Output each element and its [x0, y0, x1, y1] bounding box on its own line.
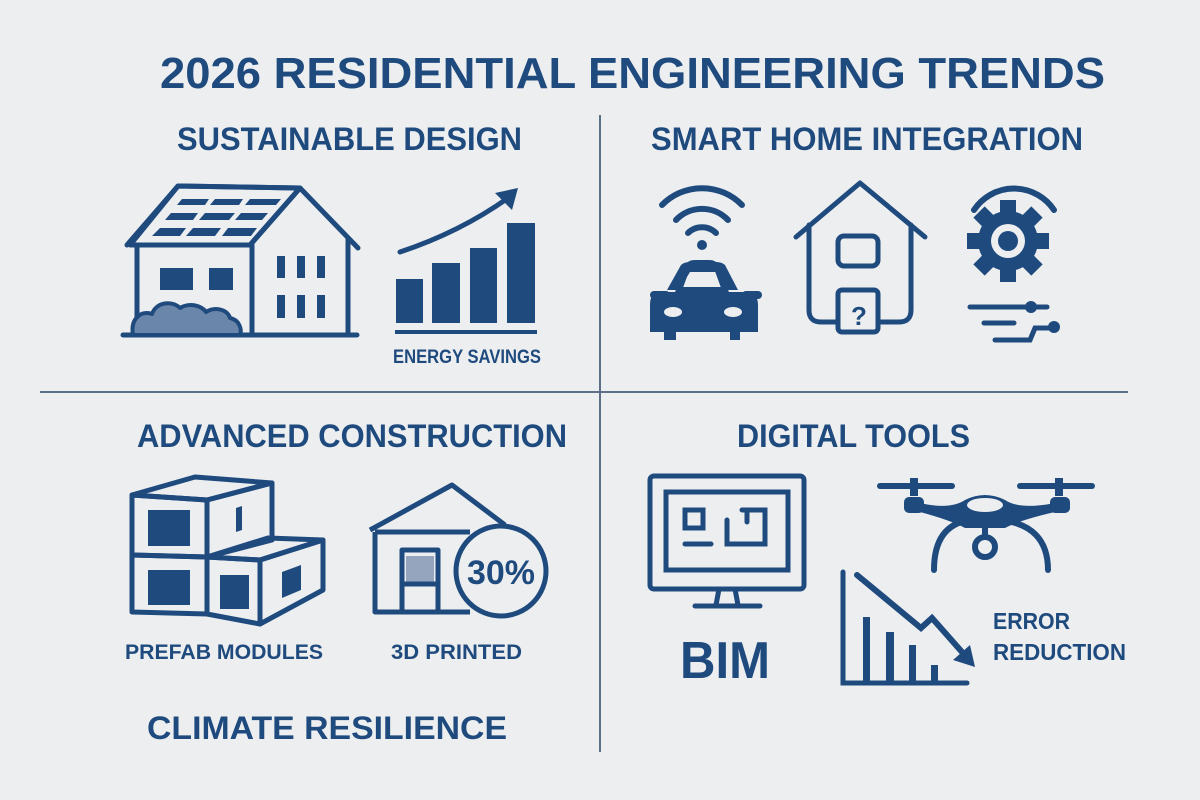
icon: smart house: ?: [851, 301, 867, 331]
heading: climate resilience: CLIMATE RESILIENCE: [147, 710, 507, 746]
icon: smart house: [796, 183, 925, 332]
heading: advanced construction: ADVANCED CONSTRUCTION: [137, 418, 567, 454]
icon: drone: [880, 478, 1092, 570]
label: prefab modules: PREFAB MODULES: [125, 641, 323, 664]
chart: energy savings: [395, 188, 537, 334]
icon: connected car: [650, 188, 762, 340]
chart: error reduction: [843, 572, 975, 683]
icon: 3d printed house: [370, 485, 546, 616]
title: 2026 RESIDENTIAL ENGINEERING TRENDS: [160, 49, 1105, 98]
label: 3d printed: 3D PRINTED: [391, 641, 522, 664]
label: BIM: BIM: [680, 632, 770, 690]
icon: 3d printed house: 30%: [467, 554, 535, 592]
heading: sustainable design: SUSTAINABLE DESIGN: [177, 121, 522, 157]
heading: smart home integration: SMART HOME INTEGRATION: [651, 121, 1083, 157]
label: error reduction: REDUCTION: [993, 639, 1126, 665]
icon: gear with sliders: [967, 189, 1060, 340]
icon: BIM monitor: [650, 476, 804, 606]
label: error reduction: [993, 608, 1126, 665]
heading: digital tools: DIGITAL TOOLS: [737, 418, 970, 454]
icon: solar house: [123, 186, 358, 335]
label: energy savings: ENERGY SAVINGS: [393, 347, 541, 368]
label: error reduction: ERROR: [993, 608, 1070, 634]
icon: prefab modules: [132, 477, 323, 624]
